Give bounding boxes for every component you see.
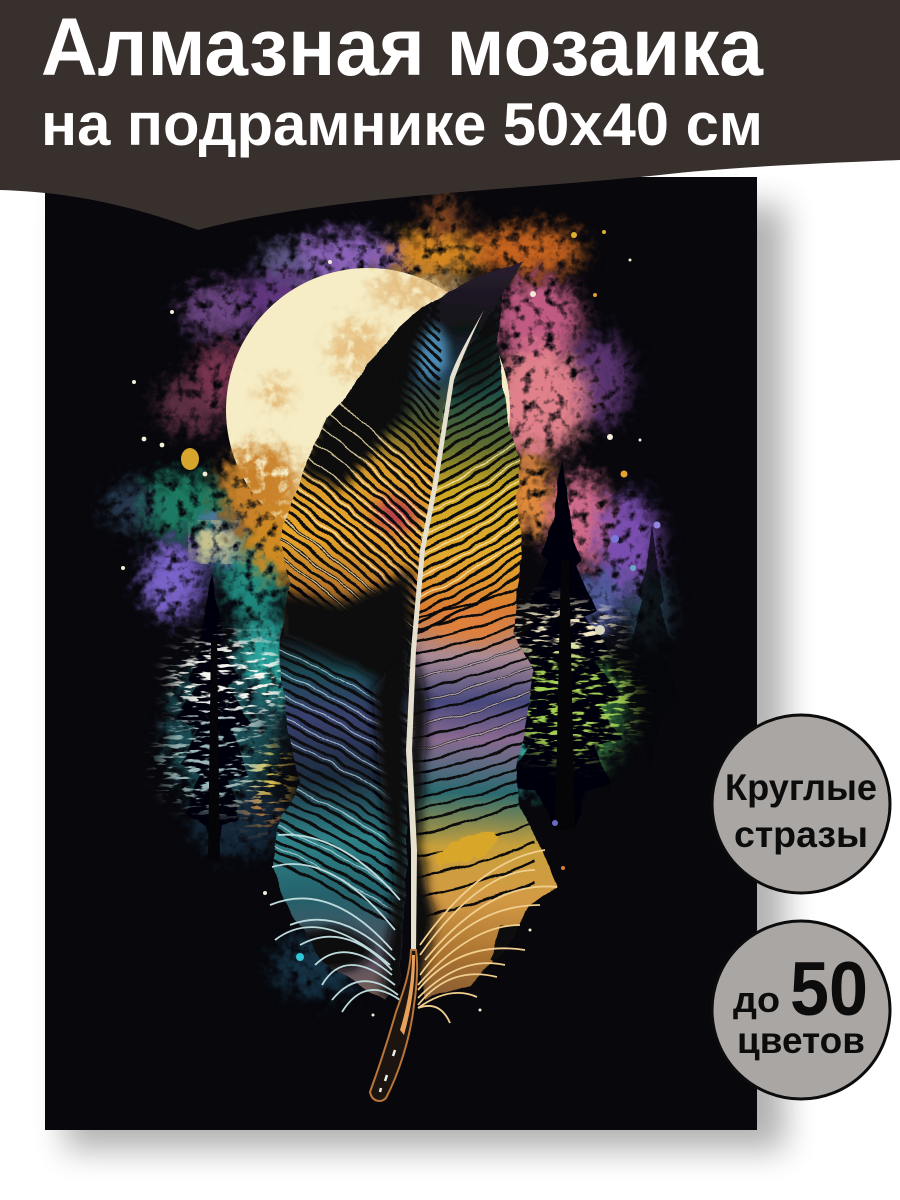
far right tree — [625, 525, 680, 770]
left tree — [178, 573, 252, 860]
badge: up to 50 colours — [712, 921, 890, 1099]
pink patch — [373, 497, 417, 533]
gold splash — [435, 831, 498, 866]
black band — [275, 570, 412, 700]
lower right pale highlights — [405, 642, 535, 752]
tree trunks — [208, 560, 575, 860]
badge: up to 50 colours: до — [733, 979, 780, 1020]
upper left dark barbs — [280, 300, 442, 696]
badge: up to 50 colours: 50 — [790, 947, 868, 1032]
feather right vane — [406, 274, 558, 1000]
quill shaft — [406, 310, 484, 950]
orange splash — [430, 609, 510, 641]
badge: round rhinestones: стразы — [734, 814, 868, 855]
moon — [222, 268, 510, 580]
subtitle: на подрамнике 50х40 см — [41, 91, 763, 158]
feather — [270, 261, 558, 1102]
badge: up to 50 colours: цветов — [737, 1020, 865, 1061]
quill base — [370, 950, 417, 1101]
bottom right plumes — [418, 850, 557, 1023]
lower left pale highlights — [270, 645, 410, 921]
blue patch — [412, 324, 448, 380]
header banner — [0, 0, 900, 230]
stars — [121, 230, 660, 1016]
upper left gold highlights — [280, 403, 432, 667]
canvas shadow — [65, 205, 785, 1150]
right tree — [505, 458, 625, 830]
black hollow — [277, 928, 373, 972]
dark strip near quill — [408, 640, 436, 1000]
bottom left plumes — [270, 835, 400, 1012]
quill gold highlight — [400, 955, 415, 1035]
badge: round rhinestones: Круглые — [725, 767, 877, 808]
tree branch highlights — [160, 602, 635, 828]
pale cloud by moon — [193, 524, 241, 560]
upper black edge — [300, 290, 440, 490]
badge: round rhinestones — [712, 715, 890, 893]
feather left vane — [273, 261, 524, 1000]
lower left dark barbs — [270, 640, 410, 937]
upper black shade — [445, 290, 505, 400]
title: Алмазная мозаика — [41, 2, 764, 93]
black gap near quill — [372, 640, 408, 1000]
bottom black gaps — [490, 925, 518, 962]
painting canvas — [45, 130, 757, 1130]
nebula background — [108, 198, 668, 995]
lower right dark barbs — [405, 582, 535, 920]
upper right dark barbs — [412, 294, 522, 636]
quill specks — [380, 1050, 395, 1092]
upper right gold highlights — [419, 442, 522, 598]
